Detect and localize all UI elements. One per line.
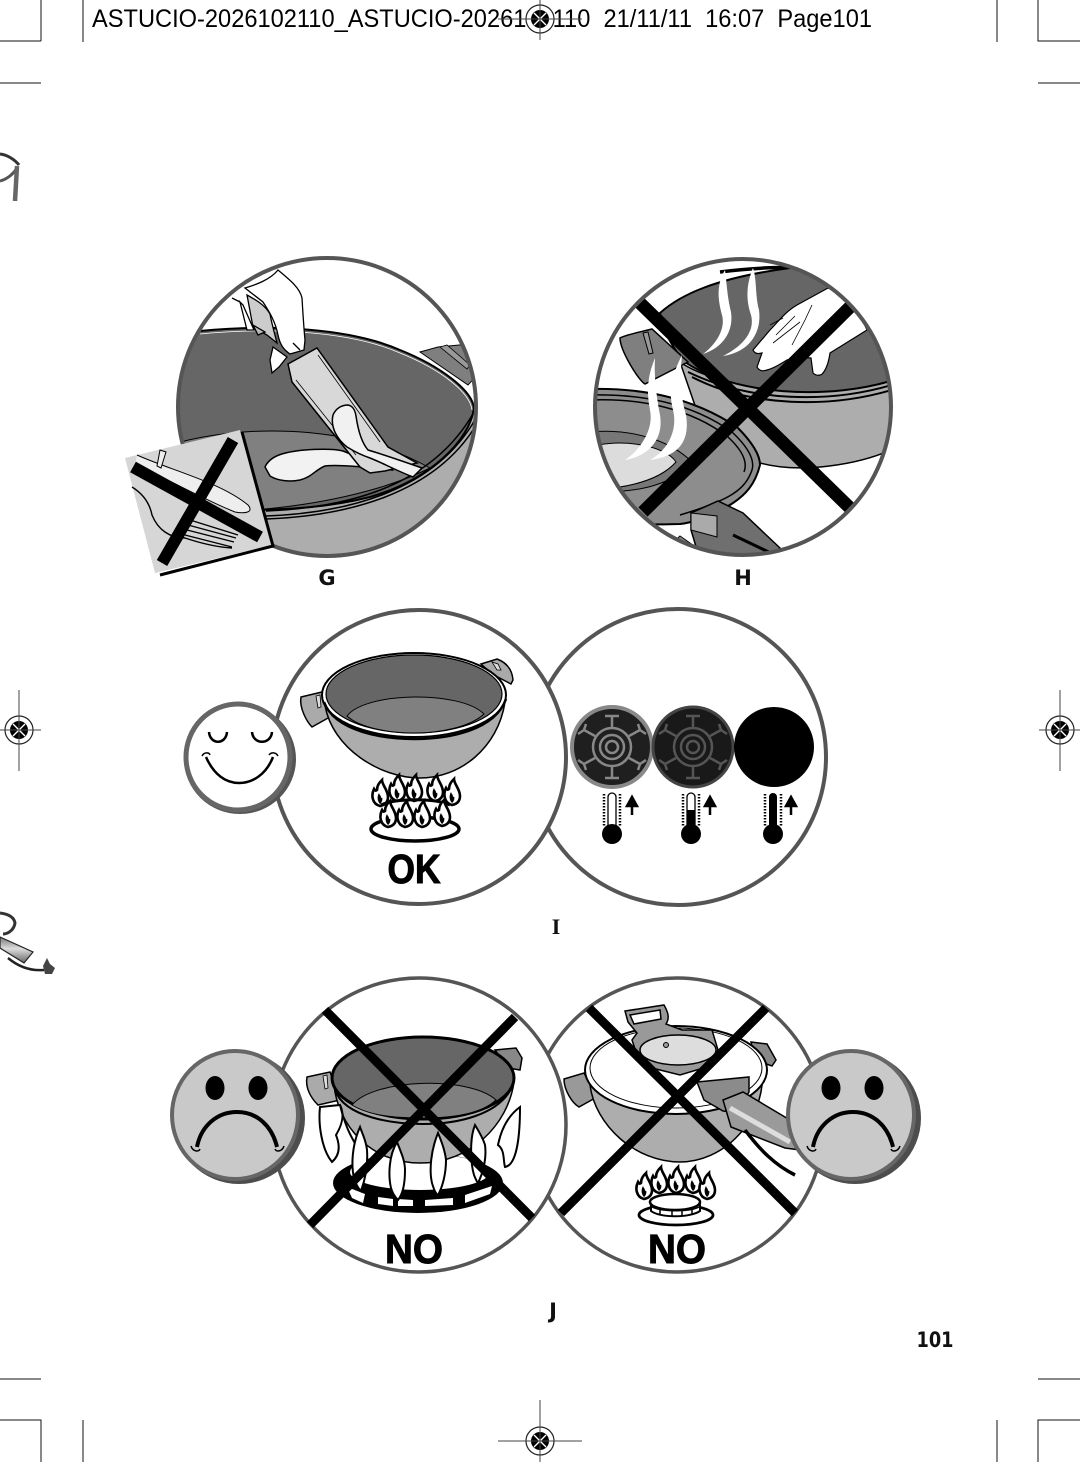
pot body: [325, 702, 505, 778]
label I: I: [552, 914, 560, 939]
inset fork: [132, 487, 238, 548]
happy face: [184, 704, 296, 814]
pan floor: [170, 431, 430, 510]
registration mark: left: [0, 690, 41, 771]
pot body: [334, 1082, 514, 1163]
pan outer wall: [265, 416, 474, 554]
white gap beside the arm: [838, 307, 866, 345]
oversized burner ring: [333, 1153, 503, 1213]
hot pan handle: [620, 329, 688, 384]
pan inner wall: [170, 328, 474, 510]
stray fragment: top left edge: [0, 154, 19, 201]
pot rim and interior: [322, 653, 506, 737]
sad face right: [788, 1051, 921, 1184]
pan handle, upper right: [418, 344, 472, 386]
pressure pot body: [590, 1085, 762, 1162]
sponge scraper: [332, 405, 422, 477]
hot pan rim: [688, 372, 895, 402]
sponge handle: [288, 348, 417, 473]
lower pan handle: [678, 500, 781, 553]
long pan handle: [697, 1077, 800, 1175]
pot handle left: [301, 692, 337, 727]
panel H: do not touch hot pan: [590, 259, 900, 560]
panel G: cleaning pan with sponge: [125, 258, 480, 575]
pot handle right: [481, 659, 513, 684]
cross-out: [640, 303, 850, 512]
inset cross: [133, 440, 260, 563]
lower lid centre: [599, 430, 688, 492]
burner with flames: [371, 775, 460, 841]
cross-out: [561, 1008, 795, 1213]
thermometer low: [602, 793, 637, 844]
hot pan interior: [659, 269, 887, 394]
registration mark: bottom: [498, 1400, 582, 1462]
thermometer medium: [681, 793, 715, 844]
lid window: [640, 1035, 716, 1065]
registration mark: right: [1039, 690, 1080, 771]
sad face left: [172, 1051, 305, 1184]
pot handle right: [495, 1048, 522, 1070]
small burner: [636, 1167, 715, 1225]
spoon on pan floor: [265, 449, 392, 481]
stray fragment: cable and plug at left edge: [0, 913, 55, 974]
pot interior: [332, 1037, 514, 1119]
panel I left: pot centred on correct burner: [272, 610, 566, 904]
indicator disc cold: [572, 707, 652, 787]
registration mark: top: [498, 0, 582, 40]
indicator disc hot: [734, 707, 814, 787]
pot handle left: [307, 1072, 340, 1105]
label G: G: [318, 566, 336, 590]
thermometer high: [763, 793, 796, 844]
lid top handle: [625, 1005, 718, 1075]
oversized flames: [320, 1105, 520, 1200]
hot pan body: [680, 362, 895, 468]
steam upper: [703, 268, 759, 356]
label J: J: [547, 1299, 557, 1323]
NO text: NO: [648, 1226, 706, 1272]
steam lower: [625, 355, 687, 460]
lower lid: [590, 389, 760, 524]
inset: no metal utensils: [125, 430, 273, 575]
label H: H: [734, 566, 752, 590]
pressure pot lid: [585, 1026, 767, 1114]
page number: 101: [916, 1328, 954, 1352]
pan rim: [266, 412, 478, 519]
hand on hot pan: [753, 288, 867, 375]
panel I right: pan base heat indicator: [530, 609, 826, 905]
cross-out: [310, 1010, 532, 1225]
panel J right: pan too small handle over heat: [530, 978, 824, 1272]
header slug text: ASTUCIO-2026102110_ASTUCIO-2026102110 21/11/11 16:07 Page101: [92, 5, 872, 33]
panel J left: flames too large: [272, 978, 566, 1272]
inset knife: [135, 455, 250, 513]
OK text: OK: [388, 846, 441, 892]
pressure pot side handle: [564, 1042, 776, 1107]
indicator disc warming: [653, 707, 733, 787]
hand holding sponge: [232, 270, 305, 373]
NO text: NO: [385, 1226, 443, 1272]
